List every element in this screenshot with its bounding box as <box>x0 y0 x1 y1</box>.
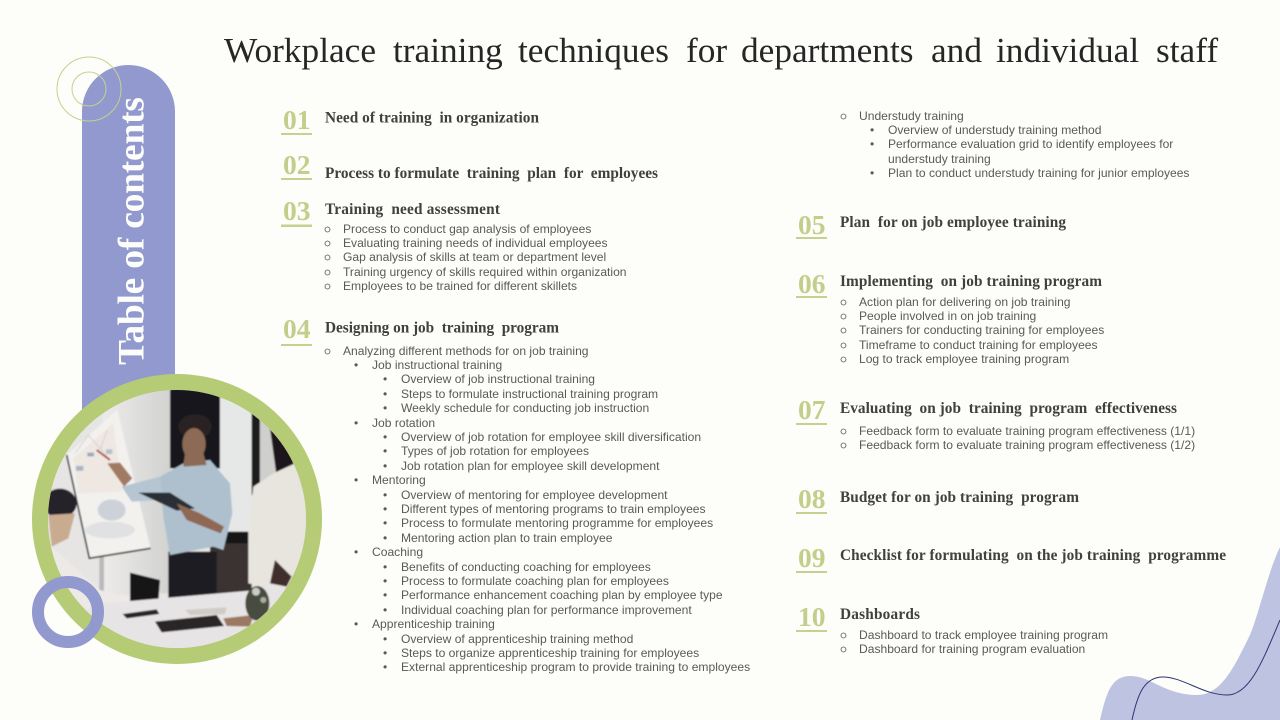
section 05: plan for on job employee training <box>796 209 1066 240</box>
list: section 04 items: • <box>354 416 358 430</box>
list: section 04 items: Benefits of conducting coaching for employees <box>401 560 651 574</box>
section 09: checklist: Checklist for formulating on the job training programme <box>840 547 1226 564</box>
list: section 04 items: Overview of apprenticeship training method <box>401 632 633 646</box>
list: section 03 items: Gap analysis of skills at team or department level <box>343 250 606 264</box>
list: section 04 items: Individual coaching plan for performance improvement <box>401 603 692 617</box>
list: section 04 continued, understudy training: understudy training <box>888 152 991 166</box>
list: section 04 items: • <box>383 459 387 473</box>
section 01: need of training <box>281 104 539 135</box>
list: section 04 items: • <box>383 444 387 458</box>
small ring accent <box>38 582 98 642</box>
list: section 04 continued, understudy training: Performance evaluation grid to identify employees for <box>888 137 1173 151</box>
icon: concentric circles <box>57 57 121 121</box>
list: section 06 items: Timeframe to conduct training for employees <box>859 338 1098 352</box>
title: individual <box>996 31 1148 70</box>
list: section 04 items: External apprenticeship program to provide training to employees <box>401 660 750 674</box>
list: section 04 items: • <box>383 516 387 530</box>
list: section 04 items: • <box>383 588 387 602</box>
list: section 10 items: Dashboard to track employee training program <box>859 628 1108 642</box>
list: section 04 items: Mentoring <box>372 473 426 487</box>
section 07: evaluating program effectiveness <box>796 394 1195 452</box>
list: section 04 items: • <box>383 401 387 415</box>
list: section 03 items: Training urgency of skills required within organization <box>343 265 627 279</box>
section 06: implementing on job training program: Implementing on job training program <box>840 273 1102 290</box>
section 04: designing on job training program: Designing on job training program <box>325 320 559 336</box>
list: section 04 items: • <box>354 473 358 487</box>
section 02: process to formulate training plan <box>281 149 658 182</box>
list: section 04 items: Weekly schedule for conducting job instruction <box>401 401 649 415</box>
list: section 07 items: Feedback form to evaluate training program effectiveness (1/2) <box>859 438 1195 452</box>
section 02: process to formulate training plan: 02 <box>283 149 310 180</box>
list: section 04 items: • <box>354 358 358 372</box>
list: section 06 items: Action plan for delivering on job training <box>859 295 1070 309</box>
list: section 06 items: People involved in on job training <box>859 309 1036 323</box>
list: section 04 items: Overview of job instructional training <box>401 372 595 386</box>
list: section 04 items: Process to formulate mentoring programme for employees <box>401 516 713 530</box>
list: section 04 items: Mentoring action plan to train employee <box>401 531 613 545</box>
list: section 04 items: • <box>383 560 387 574</box>
sidebar heading: Table of contents <box>112 97 152 365</box>
photo: presenter at whiteboard in green ring <box>32 374 322 664</box>
list: section 03 items: Process to conduct gap analysis of employees <box>343 222 591 236</box>
list: section 04 items: Apprenticeship training <box>372 617 495 631</box>
list: section 06 items <box>841 295 1104 366</box>
list: section 04 items: Process to formulate coaching plan for employees <box>401 574 669 588</box>
list: section 04 items: • <box>383 632 387 646</box>
list: section 03 items: Evaluating training needs of individual employees <box>343 236 608 250</box>
list: section 04 items: Steps to organize apprenticeship training for employees <box>401 646 699 660</box>
section 06: implementing on job training program <box>796 268 1104 366</box>
list: section 04 items: Overview of job rotation for employee skill diversification <box>401 430 701 444</box>
list: section 04 items: • <box>383 502 387 516</box>
title: for <box>686 31 736 70</box>
section 03: training need assessment: 03 <box>283 195 310 226</box>
list: section 10 items <box>841 628 1108 656</box>
list: section 04 items: • <box>383 574 387 588</box>
section 02: process to formulate training plan: Process to formulate training plan for employees <box>325 165 658 182</box>
list: section 04 items: • <box>383 646 387 660</box>
list: section 04 items: Coaching <box>372 545 423 559</box>
list: section 04 items: Performance enhancement coaching plan by employee type <box>401 588 723 602</box>
section 04: designing on job training program <box>281 313 750 674</box>
list: section 06 items: Log to track employee training program <box>859 352 1069 366</box>
list: section 04 items: • <box>383 372 387 386</box>
list: section 04 items: • <box>354 617 358 631</box>
section 06: implementing on job training program: 06 <box>798 268 826 299</box>
list: section 04 items: Steps to formulate instructional training program <box>401 387 658 401</box>
title: training <box>393 31 512 70</box>
list: section 04 continued, understudy training: • <box>870 137 874 151</box>
list: section 07 items: Feedback form to evaluate training program effectiveness (1/1) <box>859 424 1195 438</box>
section 08: budget: Budget for on job training program <box>840 489 1079 506</box>
section 09: checklist: 09 <box>798 542 826 573</box>
list: section 04 continued, understudy training: Plan to conduct understudy training for junior employees <box>888 166 1189 180</box>
title: Workplace <box>224 31 385 70</box>
title: and <box>931 31 991 70</box>
panel: table of contents side pill <box>57 57 175 465</box>
section 05: plan for on job employee training: Plan for on job employee training <box>840 214 1066 231</box>
section 07: evaluating program effectiveness: 07 <box>798 394 826 425</box>
list: section 03 items: Employees to be trained for different skillets <box>343 279 577 293</box>
list: section 04 items: • <box>383 430 387 444</box>
list: section 04 items: Different types of mentoring programs to train employees <box>401 502 706 516</box>
section 08: budget: 08 <box>798 483 826 514</box>
list: section 04 continued, understudy training: Understudy training <box>859 109 964 123</box>
list: section 06 items: Trainers for conducting training for employees <box>859 323 1104 337</box>
section 10: dashboards: 10 <box>798 601 826 632</box>
title: departments <box>741 31 922 70</box>
list: section 04 items: Job instructional training <box>372 358 502 372</box>
list: section 04 continued, understudy training: • <box>870 166 874 180</box>
list: section 04 continued, understudy training: • <box>870 123 874 137</box>
list: section 07 items <box>841 424 1195 452</box>
list: section 04 items: • <box>354 545 358 559</box>
section 07: evaluating program effectiveness: Evaluating on job training program effectiveness <box>840 400 1177 417</box>
section 04: designing on job training program: 04 <box>283 313 311 344</box>
section 03: training need assessment <box>281 195 627 293</box>
list: section 04 items: • <box>383 660 387 674</box>
section 10: dashboards: Dashboards <box>840 606 920 623</box>
list: section 04 items: Analyzing different methods for on job training <box>343 344 589 358</box>
section 01: need of training: Need of training in organization <box>325 110 539 126</box>
section 10: dashboards <box>796 601 1108 656</box>
section 08: budget <box>796 483 1079 514</box>
title: techniques <box>518 31 678 70</box>
section 09: checklist <box>796 542 1226 573</box>
list: section 04 items: Overview of mentoring for employee development <box>401 488 668 502</box>
list: section 10 items: Dashboard for training program evaluation <box>859 642 1085 656</box>
list: section 04 items: • <box>383 531 387 545</box>
list: section 04 continued, understudy training <box>841 109 1189 180</box>
title: staff <box>1156 31 1218 70</box>
section 03: training need assessment: Training need assessment <box>325 201 501 218</box>
list: section 04 items: Job rotation plan for employee skill development <box>401 459 660 473</box>
list: section 04 items: Types of job rotation for employees <box>401 444 589 458</box>
list: section 04 items: • <box>383 488 387 502</box>
list: section 04 items <box>325 344 750 674</box>
list: section 04 items: Job rotation <box>372 416 435 430</box>
section 05: plan for on job employee training: 05 <box>798 209 826 240</box>
list: section 04 items: • <box>383 603 387 617</box>
list: section 04 continued, understudy training: Overview of understudy training method <box>888 123 1102 137</box>
section 01: need of training: 01 <box>283 104 310 135</box>
list: section 04 items: • <box>383 387 387 401</box>
list: section 03 items <box>325 222 627 293</box>
decorative blob: bottom right <box>1100 547 1280 720</box>
